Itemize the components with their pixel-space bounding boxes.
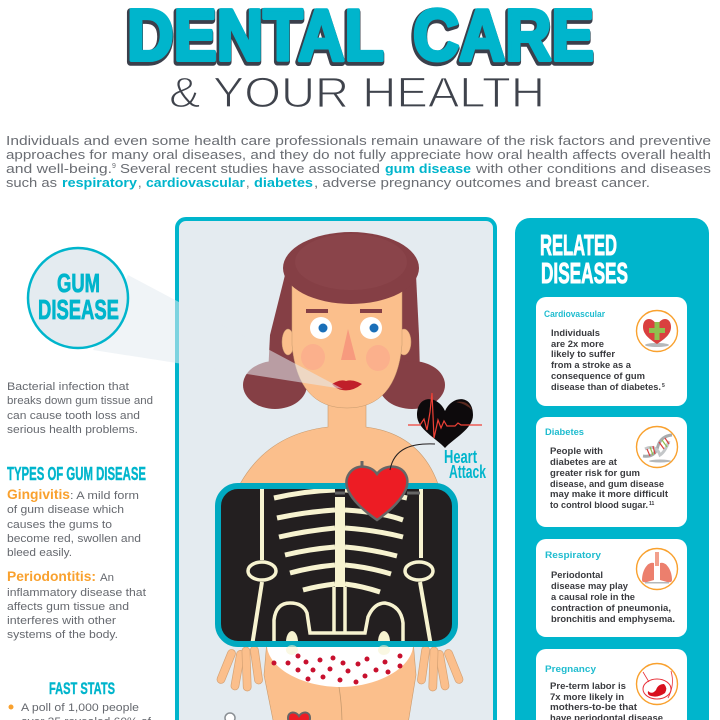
arrow: heart connector — [390, 444, 435, 470]
card: pregnancy — [536, 649, 687, 720]
gum disease definition: breaks down gum tissue and — [7, 395, 153, 407]
gingivitis text: become red, swollen and — [7, 533, 141, 545]
title: dental care — [126, 0, 594, 78]
card: pregnancy: 7x more likely in — [550, 692, 624, 703]
title: dental care: CARE — [412, 0, 593, 78]
intro paragraph: 9 — [112, 163, 116, 170]
intro paragraph: , — [246, 175, 250, 190]
icon: fetus — [636, 664, 678, 704]
intro paragraph: and well-being. — [6, 161, 112, 176]
intro paragraph: , — [138, 175, 142, 190]
gingivitis text — [7, 487, 141, 559]
magnifier beam — [93, 275, 343, 389]
card: diabetes: may make it more difficult — [550, 489, 669, 500]
icon: small ring marker — [225, 713, 235, 720]
gum disease definition: Bacterial infection that — [7, 381, 130, 393]
underwear with polka dots — [267, 645, 413, 687]
fast stats list — [8, 702, 152, 720]
intro paragraph: with other conditions and diseases — [475, 161, 711, 176]
gingivitis text: causes the gums to — [7, 519, 112, 531]
card: pregnancy: Pre-term labor is — [550, 681, 626, 692]
periodontitis text — [7, 569, 147, 641]
x-ray panel with skeleton — [218, 486, 455, 653]
intro paragraph — [6, 133, 711, 190]
heading: types of gum disease: TYPES OF GUM DISEASE — [7, 464, 146, 484]
card: pregnancy: mothers-to-be that — [550, 702, 638, 713]
gingivitis text: of gum disease which — [7, 504, 124, 516]
gum disease definition: serious health problems. — [7, 424, 138, 436]
card: respiratory — [536, 539, 687, 637]
intro paragraph: such as — [6, 175, 57, 190]
card: cardiovascular: 5 — [662, 383, 665, 389]
gum disease circle: DISEASE — [38, 294, 119, 325]
card: diabetes: diabetes are at — [550, 457, 618, 468]
icon: black heart with ecg line — [408, 393, 482, 448]
panel: body illustration — [177, 219, 495, 720]
woman figure — [216, 232, 464, 720]
periodontitis text: inflammatory disease that — [7, 587, 147, 599]
card: diabetes: Diabetes — [545, 427, 584, 438]
intro paragraph: cardiovascular — [146, 175, 245, 190]
heading: related diseases: DISEASES — [541, 258, 628, 290]
fast stats list: A poll of 1,000 people — [21, 702, 139, 714]
card: respiratory: Periodontal — [551, 570, 603, 581]
intro paragraph: respiratory — [62, 175, 138, 190]
card: cardiovascular: Individuals — [551, 328, 600, 339]
panel: related diseases — [515, 218, 709, 720]
title: dental care: DENTAL — [126, 0, 383, 78]
icon: lungs — [636, 548, 678, 590]
card: pregnancy: Pregnancy — [545, 664, 597, 675]
gingivitis text: Gingivitis — [7, 487, 70, 502]
icon: dna helix — [636, 426, 678, 468]
periodontitis text: Periodontitis: — [7, 569, 96, 584]
heading: related diseases — [540, 230, 628, 290]
card: cardiovascular: Cardiovascular — [544, 309, 605, 320]
intro paragraph: diabetes — [254, 175, 313, 190]
card: diabetes: People with — [550, 446, 603, 457]
label: heart attack — [444, 447, 487, 482]
card: cardiovascular: from a stroke as a — [551, 360, 632, 371]
card: diabetes: to control blood sugar. — [550, 500, 648, 511]
card: respiratory: contraction of pneumonia, — [551, 603, 671, 614]
heading: fast stats: FAST STATS — [49, 680, 115, 698]
card: cardiovascular — [536, 297, 687, 406]
heading: related diseases: RELATED — [540, 230, 617, 262]
gum disease circle: GUM — [57, 268, 100, 298]
subtitle: and your health: & YOUR HEALTH — [169, 69, 545, 117]
label: heart attack: Heart — [444, 447, 477, 467]
periodontitis text: interferes with other — [7, 615, 116, 627]
card: respiratory: a causal role in the — [551, 592, 635, 603]
icon: heart with plus — [636, 310, 678, 352]
card: respiratory: bronchitis and emphysema. — [551, 614, 675, 625]
periodontitis text: systems of the body. — [7, 629, 118, 641]
intro paragraph: Several recent studies have associated — [120, 161, 380, 176]
intro paragraph: gum disease — [385, 161, 471, 176]
card: cardiovascular: likely to suffer — [551, 349, 615, 360]
icon: small heart marker — [288, 712, 310, 720]
intro paragraph: approaches for many oral diseases, and they do not fully appreciate how oral health affects overall health — [6, 147, 711, 162]
card: respiratory: disease may play — [551, 581, 629, 592]
gingivitis text: : A mild form — [70, 490, 139, 502]
gum disease definition: can cause tooth loss and — [7, 410, 140, 422]
gingivitis text: bleed easily. — [7, 547, 72, 559]
card: diabetes: 11 — [649, 501, 655, 507]
card: cardiovascular: are 2x more — [551, 339, 604, 350]
card: diabetes: greater risk for gum — [550, 468, 640, 479]
card: cardiovascular: disease than of diabetes. — [551, 382, 661, 393]
card: diabetes — [536, 417, 687, 527]
card: respiratory: Respiratory — [545, 550, 602, 561]
intro paragraph: Individuals and even some health care professionals remain unaware of the risk factors and preventive — [6, 133, 711, 148]
gum disease circle — [28, 248, 128, 348]
gum disease definition — [7, 381, 153, 436]
label: heart attack: Attack — [449, 462, 487, 482]
icon: red heart — [335, 461, 420, 520]
periodontitis text: An — [100, 572, 114, 584]
card: cardiovascular: consequence of gum — [551, 371, 645, 382]
intro paragraph: , adverse pregnancy outcomes and breast cancer. — [314, 175, 650, 190]
periodontitis text: affects gum tissue and — [7, 601, 129, 613]
card: diabetes: disease, and gum disease — [550, 479, 664, 490]
